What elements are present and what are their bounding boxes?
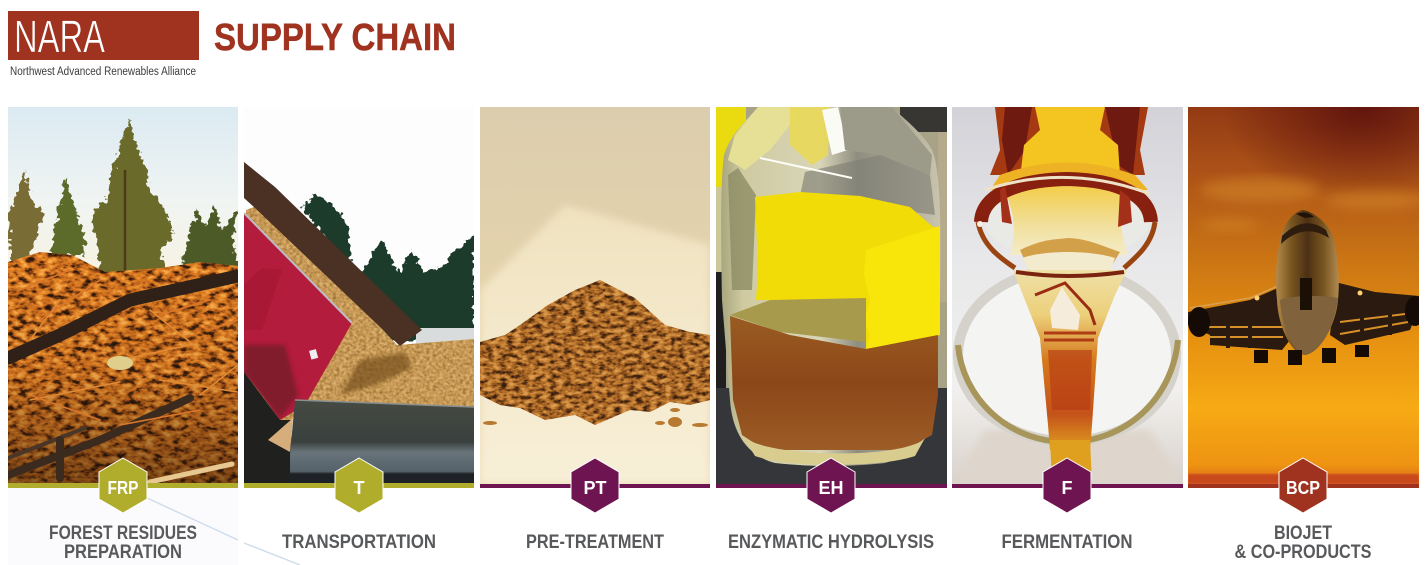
stage T marker and label: T xyxy=(354,478,364,498)
faint background panel and line xyxy=(8,488,300,565)
photo: enzymatic hydrolysis xyxy=(716,107,947,484)
stage EH marker and label: ENZYMATIC HYDROLYSIS xyxy=(728,532,934,553)
header logo: NARA: Northwest Advanced Renewables Alliance xyxy=(10,66,196,78)
stage F marker and label: FERMENTATION xyxy=(1002,532,1132,553)
stage FRP marker and label: FOREST RESIDUES xyxy=(49,523,197,544)
photo: biojet and co-products xyxy=(1188,107,1425,484)
stage PT marker and label: PRE-TREATMENT xyxy=(526,532,664,553)
photo: forest residues xyxy=(8,107,238,484)
stage BCP marker and label: BCP xyxy=(1286,478,1320,498)
stage EH marker and label: EH xyxy=(818,478,844,498)
header logo: NARA: NARA xyxy=(14,11,105,62)
header logo: NARA xyxy=(8,11,199,78)
stage FRP marker and label xyxy=(8,458,238,563)
photo: fermentation xyxy=(952,107,1183,484)
stage T marker and label: TRANSPORTATION xyxy=(282,532,436,553)
stage PT marker and label: PT xyxy=(583,478,607,498)
stage PT marker and label xyxy=(480,458,710,553)
photo: transportation xyxy=(244,162,474,483)
title: SUPPLY CHAIN xyxy=(214,17,456,59)
stage F marker and label: F xyxy=(1062,478,1072,498)
stage BCP marker and label xyxy=(1188,458,1419,563)
stage EH marker and label xyxy=(716,458,947,553)
stage FRP marker and label: FRP xyxy=(108,478,138,498)
plane xyxy=(1188,210,1425,365)
stage T marker and label xyxy=(244,458,474,553)
stage FRP marker and label: PREPARATION xyxy=(64,542,182,563)
photo: pre-treatment xyxy=(480,107,710,484)
stage F marker and label xyxy=(952,458,1183,553)
stage BCP marker and label: BIOJET xyxy=(1274,523,1332,544)
stage BCP marker and label: & CO-PRODUCTS xyxy=(1234,542,1372,563)
